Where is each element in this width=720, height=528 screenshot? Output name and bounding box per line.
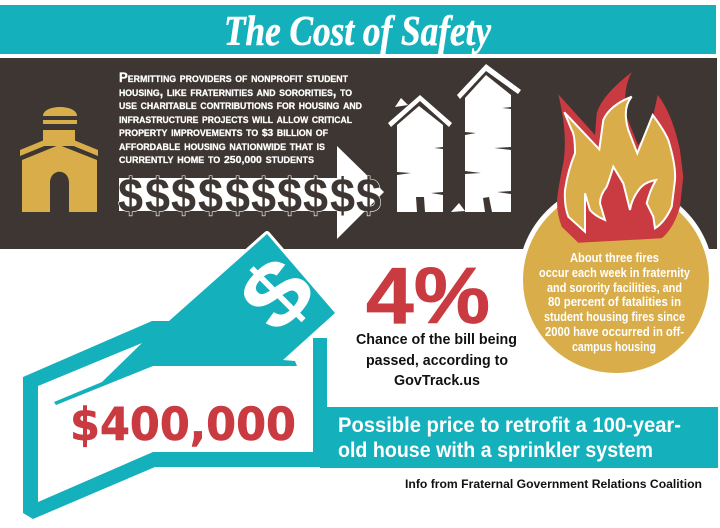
arrow with dollar signs: $ xyxy=(251,170,276,223)
paragraph: currently home to 250,000 students xyxy=(119,151,314,166)
stat caption: Chance of the bill being xyxy=(356,332,517,348)
icon: damaged houses xyxy=(388,64,521,212)
callout text xyxy=(539,251,690,354)
arrow with dollar signs: $ xyxy=(145,170,170,223)
gold circle callout xyxy=(520,184,712,376)
icon: school building xyxy=(20,107,98,212)
paragraph: housing, like fraternities and sororities, to xyxy=(119,84,352,99)
callout text: About three fires xyxy=(570,251,659,265)
arrow with dollar signs xyxy=(118,146,384,239)
paragraph: affordable housing nationwide that is xyxy=(119,138,325,153)
paragraph: Permitting providers of nonprofit student xyxy=(119,70,348,85)
source note: Info from Fraternal Government Relations Coalition xyxy=(405,477,702,491)
paragraph: property improvements to $3 billion of xyxy=(119,124,328,139)
icon: dollar on bill: $ xyxy=(220,237,334,351)
price banner xyxy=(320,407,718,468)
dark panel xyxy=(0,58,717,249)
arrow with dollar signs: $ xyxy=(118,170,143,223)
stat caption xyxy=(356,332,517,389)
price banner text: old house with a sprinkler system xyxy=(338,439,653,462)
arrow with dollar signs: $ xyxy=(198,170,223,223)
price banner text: Possible price to retrofit a 100-year- xyxy=(338,414,681,437)
arrow with dollar signs: $ xyxy=(303,170,328,223)
callout text: and sorority facilities, and xyxy=(547,281,682,295)
icon: flame xyxy=(557,72,683,243)
paragraph xyxy=(119,70,362,166)
title: The Cost of Safety xyxy=(224,9,491,55)
callout text: student housing fires since xyxy=(544,310,685,324)
price banner text xyxy=(338,414,681,462)
arrow with dollar signs: $ xyxy=(330,170,355,223)
callout text: campus housing xyxy=(572,340,656,354)
stat: 4%: 4% xyxy=(366,251,490,340)
arrow with dollar signs: $ xyxy=(225,170,250,223)
paragraph: use charitable contributions for housing and xyxy=(119,97,362,112)
arrow with dollar signs: $ xyxy=(356,170,381,223)
stat caption: GovTrack.us xyxy=(394,373,480,389)
arrow with dollar signs: $ xyxy=(277,170,302,223)
arrow with dollar signs: $ xyxy=(171,170,196,223)
callout text: occur each week in fraternity xyxy=(539,266,690,280)
stat caption: passed, according to xyxy=(366,353,508,369)
value: $400,000: $400,000 xyxy=(70,398,296,451)
icon: wallet with money xyxy=(23,234,335,519)
paragraph: infrastructure projects will allow critical xyxy=(119,111,352,126)
title banner xyxy=(0,5,716,55)
callout text: 2000 have occurred in off- xyxy=(545,325,684,339)
callout text: 80 percent of fatalities in xyxy=(548,295,681,309)
